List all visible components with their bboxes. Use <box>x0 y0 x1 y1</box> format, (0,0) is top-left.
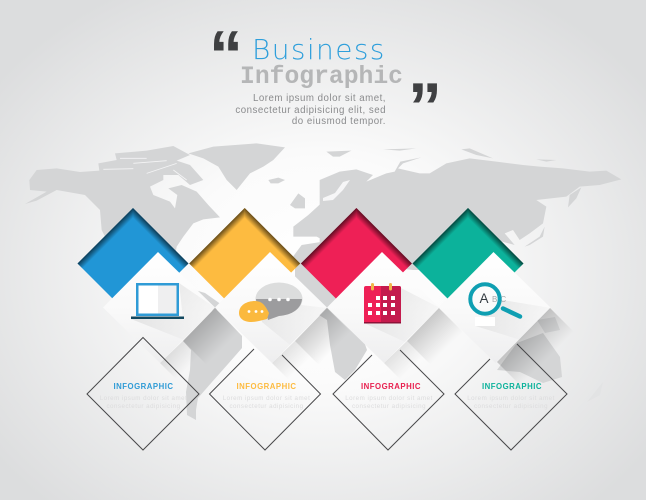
card text: blue: INFOGRAPHIC <box>113 382 174 391</box>
New Zealand <box>587 382 603 402</box>
title: Business <box>252 33 386 66</box>
card text: red: Lorem ipsum dolor sit amet <box>345 395 433 402</box>
panel: blue diamond <box>78 208 188 319</box>
title: Infographic <box>240 63 403 91</box>
seas on the map <box>323 180 350 201</box>
card text: blue: consectetur adipisicing <box>106 403 181 410</box>
Australia <box>497 333 562 383</box>
Indonesia <box>537 317 560 333</box>
subtitle text: Lorem ipsum dolor sit amet, <box>253 93 386 104</box>
closing quote: ” <box>408 69 442 145</box>
white tile: blue <box>103 252 215 363</box>
icon: magnifier ABC <box>470 284 550 340</box>
icon: chat bubbles <box>239 282 327 345</box>
title <box>240 33 403 91</box>
panel: green diamond <box>412 208 524 319</box>
card text: red: consectetur adipisicing <box>352 403 426 410</box>
card text: green: Lorem ipsum dolor sit amet <box>467 395 555 402</box>
card text: yellow: consectetur adipisicing <box>229 403 304 410</box>
white tile: red <box>327 252 439 363</box>
opening quote: “ <box>209 17 243 93</box>
icon: laptop <box>131 283 215 340</box>
card text: blue <box>100 382 187 410</box>
outline diamonds <box>87 338 567 450</box>
South America <box>183 308 242 420</box>
card text: green: INFOGRAPHIC <box>482 382 542 391</box>
ribbon shadows <box>160 308 599 411</box>
subtitle text <box>235 93 386 127</box>
world map <box>25 143 621 420</box>
card text: green: consectetur adipisicing <box>474 403 548 410</box>
card text: yellow <box>223 382 310 410</box>
card text: yellow: Lorem ipsum dolor sit amet <box>223 395 310 402</box>
Central America <box>195 290 222 312</box>
card text: green <box>467 382 555 410</box>
icon: calendar <box>364 283 440 342</box>
icon: magnifier ABC: BC <box>492 295 509 304</box>
subtitle text: consectetur adipisicing elit, sed <box>235 105 386 116</box>
white tile: yellow <box>215 252 327 363</box>
white tile: green <box>438 252 550 363</box>
card text: red <box>345 382 433 410</box>
icon: magnifier ABC: A <box>480 291 489 306</box>
card text: yellow: INFOGRAPHIC <box>236 382 297 391</box>
panel: red diamond <box>301 208 412 319</box>
card text: blue: Lorem ipsum dolor sit amet <box>100 395 187 402</box>
Africa <box>295 262 367 380</box>
card text: red: INFOGRAPHIC <box>361 382 421 391</box>
subtitle text: do eiusmod tempor. <box>292 116 386 127</box>
panel: yellow diamond <box>189 208 300 319</box>
